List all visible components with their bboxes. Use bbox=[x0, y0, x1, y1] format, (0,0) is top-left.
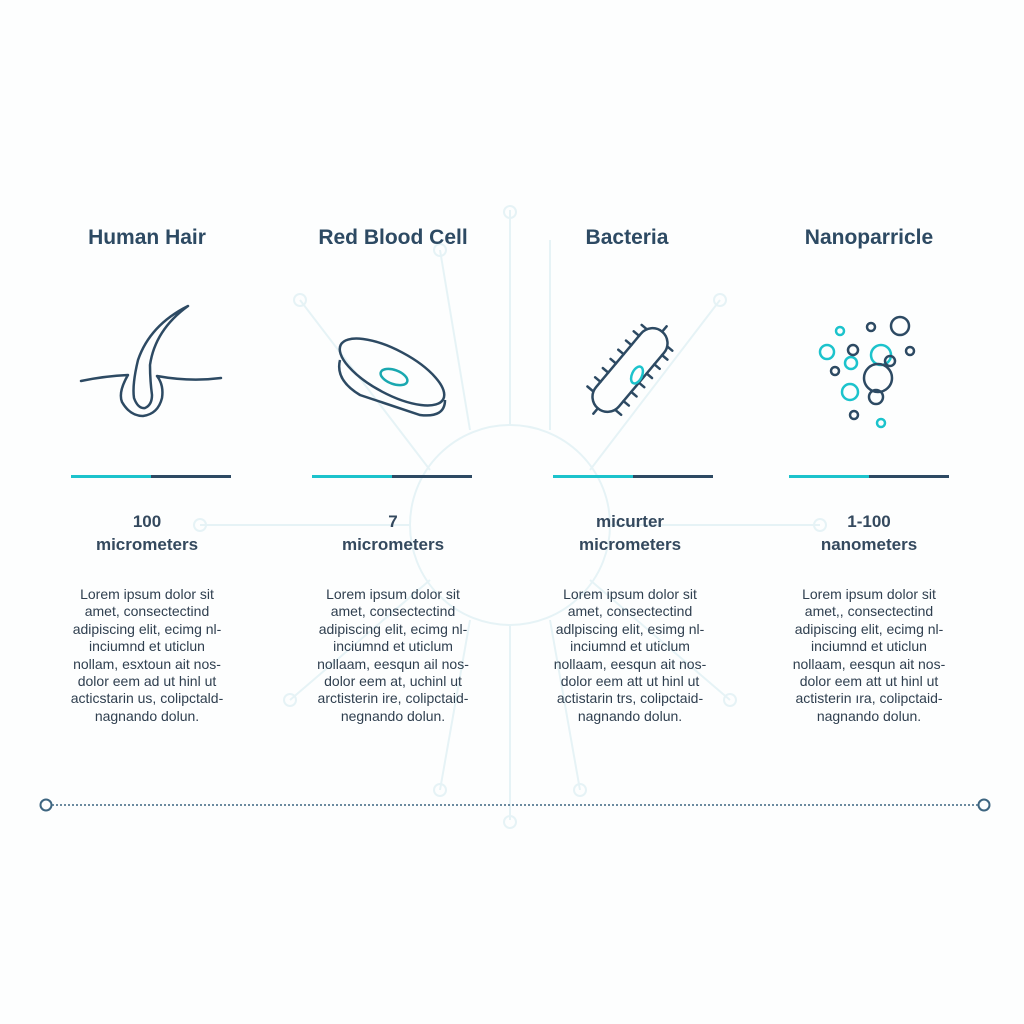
text: actistarin trs, colipctaid- bbox=[557, 690, 703, 706]
text: Lorem ipsum dolor sit bbox=[80, 586, 214, 602]
text: amet, consectectind bbox=[331, 603, 455, 619]
text: 7 bbox=[388, 512, 398, 531]
column 1: Human Hair: Human Hair bbox=[88, 226, 206, 249]
text: arctisterin ire, colipctaid- bbox=[318, 690, 468, 706]
text: amet, consectectind bbox=[568, 603, 692, 619]
text: dolor eem att ut hinl ut bbox=[561, 673, 699, 689]
text: dolor eem att ut hinl ut bbox=[800, 673, 938, 689]
text: Lorem ipsum dolor sit bbox=[563, 586, 697, 602]
text: adipiscing elit, ecimg nl- bbox=[795, 621, 943, 637]
text: adipiscing elit, ecimg nl- bbox=[319, 621, 467, 637]
text: nollam, esxtoun ait nos- bbox=[73, 656, 221, 672]
column 3: Bacteria: Bacteria bbox=[586, 226, 668, 249]
text: inciumnd et uticlum bbox=[333, 638, 453, 654]
text: amet,, consectectind bbox=[805, 603, 933, 619]
text: inciumnd et uticlun bbox=[89, 638, 205, 654]
text: adlpiscing elit, esimg nl- bbox=[556, 621, 704, 637]
text: adipiscing elit, ecimg nl- bbox=[73, 621, 221, 637]
text: amet, consectectind bbox=[85, 603, 209, 619]
text: dolor eem ad ut hinl ut bbox=[78, 673, 216, 689]
text: 100 bbox=[133, 512, 161, 531]
text: actisterin ıra, colipctaid- bbox=[795, 690, 943, 706]
text: micrometers bbox=[96, 535, 198, 554]
text: nollaam, eesqun ait nos- bbox=[554, 656, 706, 672]
text: nanometers bbox=[821, 535, 917, 554]
text: Lorem ipsum dolor sit bbox=[802, 586, 936, 602]
text: micrometers bbox=[342, 535, 444, 554]
text: nollaam, eesqun ait nos- bbox=[793, 656, 945, 672]
column 2: Red Blood Cell: Red Blood Cell bbox=[318, 226, 468, 249]
text: nagnando dolun. bbox=[578, 708, 682, 724]
text: acticstarin us, colipctald- bbox=[71, 690, 223, 706]
text: inciumnd et uticlum bbox=[570, 638, 690, 654]
column 4: Nanoparticle: Nanoparricle bbox=[805, 226, 933, 249]
text: negnando dolun. bbox=[341, 708, 445, 724]
text: micrometers bbox=[579, 535, 681, 554]
text: 1-100 bbox=[847, 512, 891, 531]
scale line bbox=[40, 798, 990, 812]
text: nagnando dolun. bbox=[817, 708, 921, 724]
text: nagnando dolun. bbox=[95, 708, 199, 724]
text: dolor eem at, uchinl ut bbox=[324, 673, 462, 689]
text: nollaam, eesqun ail nos- bbox=[317, 656, 469, 672]
text: micurter bbox=[596, 512, 664, 531]
text: Lorem ipsum dolor sit bbox=[326, 586, 460, 602]
text: inciumnd et uticlun bbox=[811, 638, 927, 654]
